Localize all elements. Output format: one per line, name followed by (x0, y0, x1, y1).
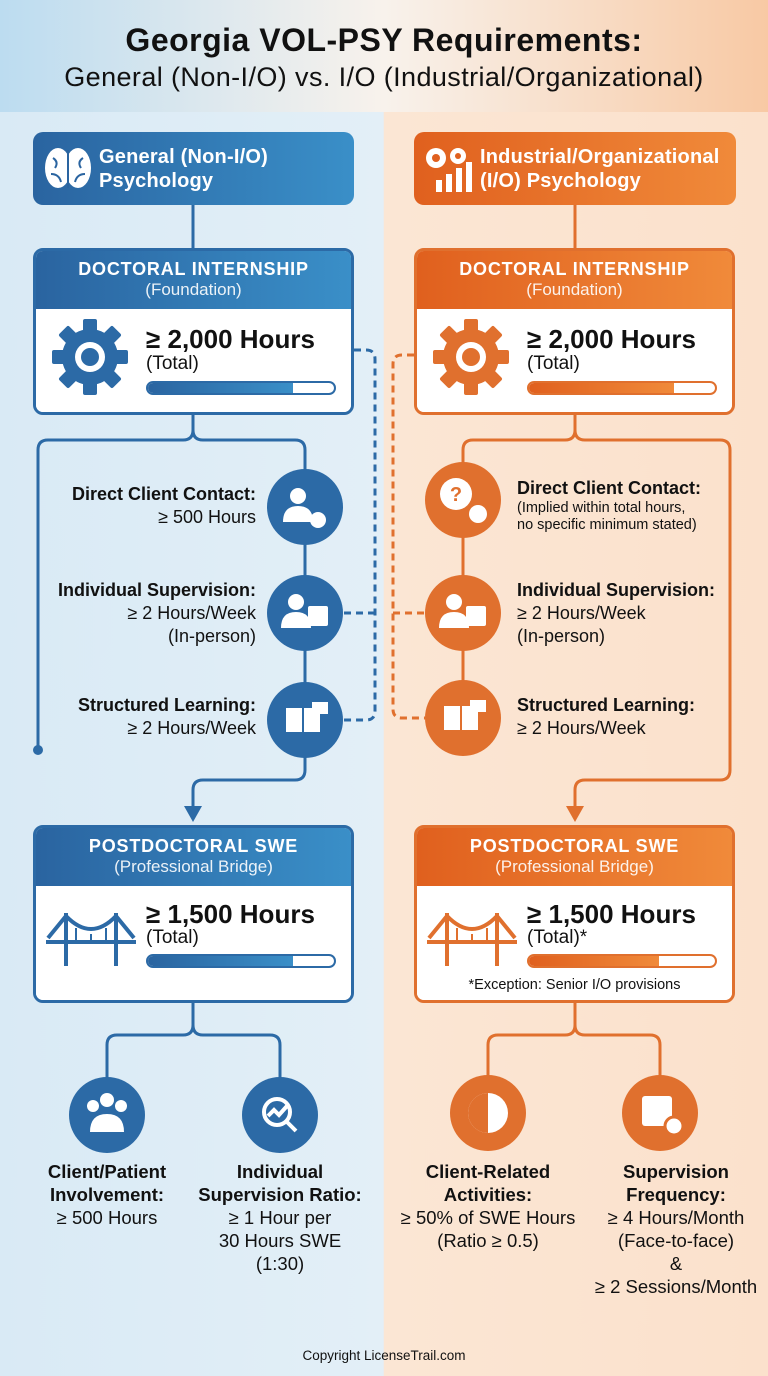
labels: I/O doctoral: no specific minimum stated) (517, 517, 697, 533)
panel: doctoral I/O: ≥ 2,000 Hours (527, 324, 696, 354)
title band (0, 0, 768, 112)
text: Structured Learning: (517, 695, 695, 715)
panel: doctoral I/O: DOCTORAL INTERNSHIP (459, 259, 690, 279)
labels: general doctoral: ≥ 500 Hours (158, 507, 256, 527)
icons: doctoral circles: ? (450, 484, 462, 506)
panel: postdoc I/O: *Exception: Senior I/O provisions (469, 977, 680, 993)
icon: bridge (46, 913, 136, 966)
header: I/O: (I/O) Psychology (480, 170, 641, 192)
text: Supervision (623, 1161, 729, 1182)
panel: postdoc general: ≥ 1,500 Hours (146, 899, 315, 929)
header: general (33, 132, 354, 205)
labels: postdoc general: ≥ 500 Hours (57, 1207, 157, 1228)
labels: postdoc I/O: (Ratio ≥ 0.5) (437, 1230, 539, 1251)
panel: postdoc general: (Professional Bridge) (114, 857, 273, 876)
header: general: General (Non-I/O) (99, 146, 268, 168)
text: & (670, 1253, 682, 1274)
panel: postdoc general: POSTDOCTORAL SWE (89, 836, 298, 856)
text: ≥ 4 Hours/Month (608, 1207, 744, 1228)
labels: I/O doctoral: Direct Client Contact: (517, 478, 701, 498)
panel: postdoc general (33, 825, 354, 1003)
panel: doctoral general: ≥ 2,000 Hours (146, 324, 315, 354)
labels: I/O doctoral (517, 478, 701, 533)
text: ≥ 2 Hours/Week (127, 603, 256, 623)
icon: brain (45, 148, 91, 188)
panel: doctoral I/O: (Foundation) (526, 280, 623, 299)
text: 30 Hours SWE (219, 1230, 341, 1251)
text: ≥ 2 Hours/Week (517, 718, 646, 738)
title: Georgia VOL-PSY Requirements: (125, 22, 643, 58)
footer: Copyright LicenseTrail.com (302, 1348, 466, 1363)
title (64, 22, 704, 92)
header: I/O (414, 132, 736, 205)
text: ≥ 1 Hour per (229, 1207, 331, 1228)
title: General (Non-I/O) vs. I/O (Industrial/Organizational) (64, 62, 704, 92)
panel: doctoral I/O (414, 248, 735, 415)
labels: I/O doctoral: (Implied within total hours, (517, 500, 685, 516)
labels: postdoc I/O: ≥ 50% of SWE Hours (401, 1207, 575, 1228)
labels: general doctoral (72, 484, 256, 527)
panel: postdoc I/O: ≥ 1,500 Hours (527, 899, 696, 929)
labels: postdoc general (48, 1161, 166, 1228)
panel: doctoral I/O: (Total) (527, 353, 580, 374)
panel: doctoral general: (Total) (146, 353, 199, 374)
header: general: Psychology (99, 170, 213, 192)
panel: doctoral general (33, 248, 354, 415)
icon: gears chart (426, 148, 472, 192)
labels: general doctoral: Direct Client Contact: (72, 484, 256, 504)
panel: doctoral general: (Foundation) (145, 280, 242, 299)
panel: doctoral general: DOCTORAL INTERNSHIP (78, 259, 309, 279)
icon: gear (52, 319, 128, 395)
text: Structured Learning: (78, 695, 256, 715)
panel: postdoc general: (Total) (146, 927, 199, 948)
text: ≥ 2 Sessions/Month (595, 1276, 757, 1297)
text: ≥ 2 Hours/Week (517, 603, 646, 623)
labels: postdoc I/O: Activities: (444, 1184, 532, 1205)
text: ≥ 2 Hours/Week (127, 718, 256, 738)
labels: postdoc general: Involvement: (50, 1184, 164, 1205)
panel: postdoc I/O: POSTDOCTORAL SWE (470, 836, 679, 856)
labels: postdoc I/O: Client-Related (426, 1161, 550, 1182)
panel: postdoc I/O: (Professional Bridge) (495, 857, 654, 876)
panel: postdoc I/O: (Total)* (527, 927, 587, 948)
labels: postdoc I/O (401, 1161, 575, 1251)
text: (Face-to-face) (618, 1230, 734, 1251)
text: (In-person) (517, 626, 605, 646)
text: Supervision Ratio: (198, 1184, 362, 1205)
text: (In-person) (168, 626, 256, 646)
text: Individual (237, 1161, 323, 1182)
text: Frequency: (626, 1184, 726, 1205)
text: Individual Supervision: (58, 580, 256, 600)
labels: postdoc general: Client/Patient (48, 1161, 166, 1182)
icon: bridge (427, 913, 517, 966)
panel: postdoc I/O (414, 825, 735, 1003)
text: Individual Supervision: (517, 580, 715, 600)
text: (1:30) (256, 1253, 304, 1274)
header: I/O: Industrial/Organizational (480, 146, 719, 168)
icon: gear (433, 319, 509, 395)
